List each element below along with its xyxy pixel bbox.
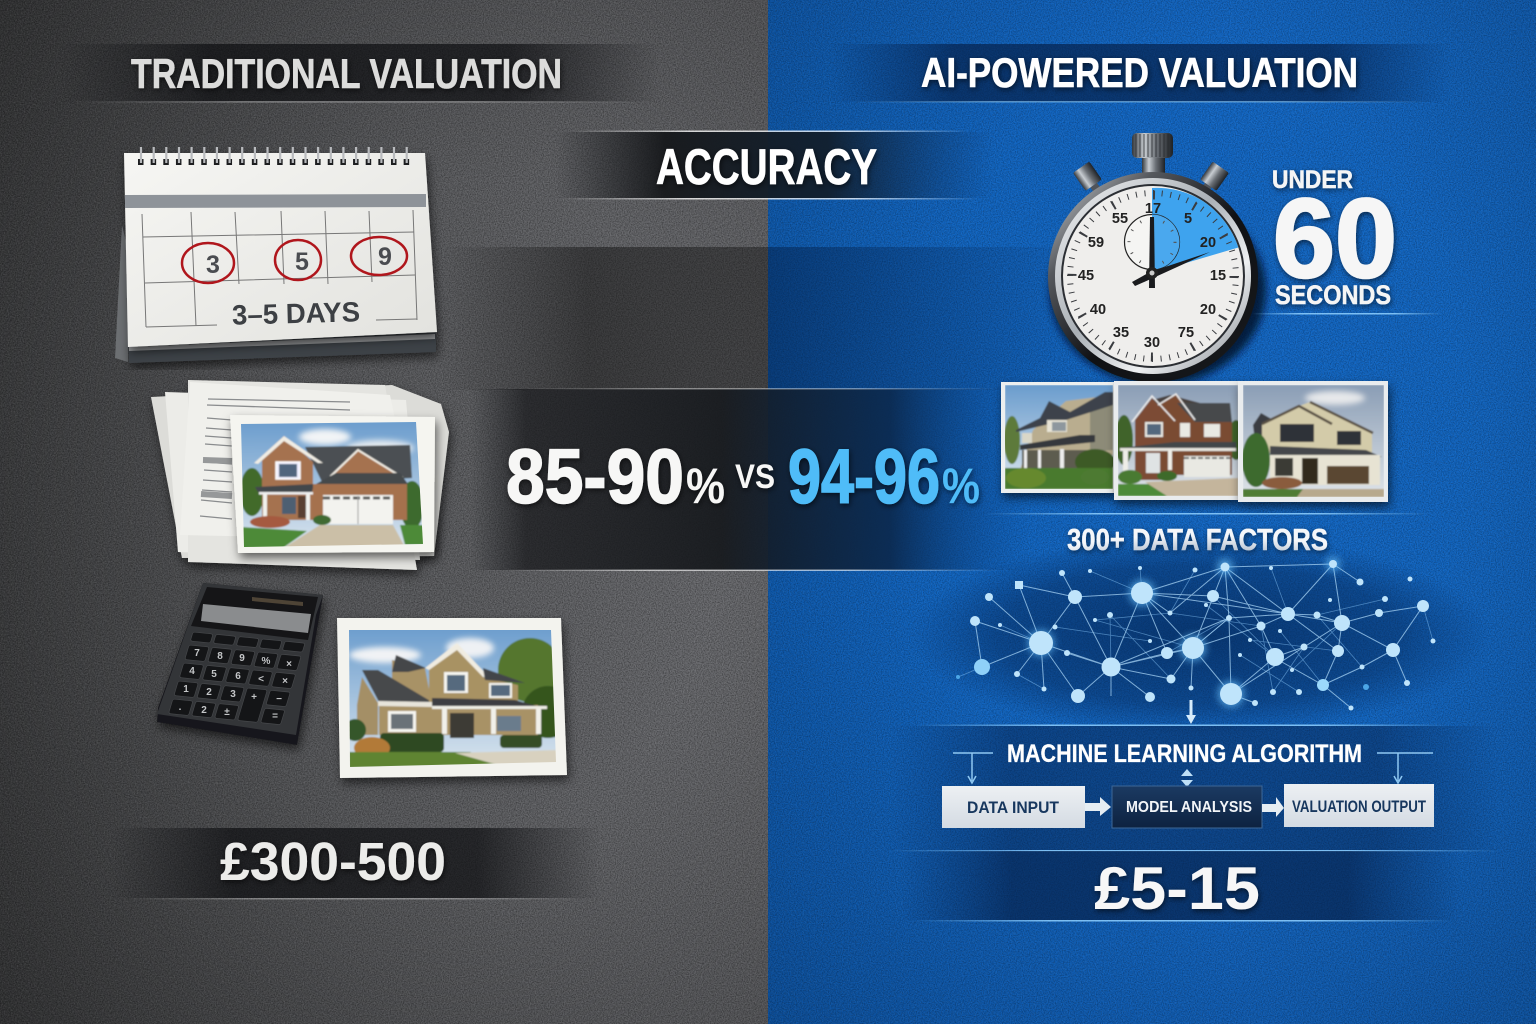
- blue elapsed wedge: [1152, 188, 1240, 273]
- icon: calculator: <: [258, 674, 264, 685]
- icon: paper stack with house photo: [151, 380, 449, 570]
- icon: calculator: .: [179, 702, 182, 713]
- icon: calculator: 5: [211, 669, 217, 680]
- icon: calculator: 4: [189, 666, 195, 677]
- icon: desk calendar: 9: [378, 243, 392, 271]
- icon: stopwatch: [1048, 133, 1266, 385]
- flow box: data input: DATA INPUT: [967, 798, 1060, 817]
- dial numbers: 30: [1144, 335, 1160, 351]
- dark upper accuracy section: [440, 247, 1088, 390]
- arrow: input to model: [1085, 797, 1111, 816]
- dial numbers: 20: [1200, 235, 1216, 251]
- cost band: traditional: [110, 828, 600, 900]
- stat: under 60 seconds: 60: [1273, 176, 1397, 301]
- network links: [975, 564, 1423, 708]
- heading: AI-powered valuation: AI-POWERED VALUATION: [921, 49, 1358, 96]
- icon: calculator: 6: [235, 671, 241, 682]
- stat: accuracy 85-90% vs 94-96%: [506, 434, 980, 520]
- icon: calculator: [157, 583, 323, 745]
- dial numbers: 20: [1200, 302, 1216, 318]
- network glow nodes: [1028, 557, 1340, 707]
- icon: desk calendar: 3–5 DAYS: [232, 296, 360, 331]
- icon: desk calendar: 5: [295, 248, 309, 276]
- icon: calculator: 3: [230, 689, 236, 700]
- icon: calculator: +: [251, 692, 257, 703]
- photo 3: [1238, 381, 1388, 502]
- dial numbers: 59: [1088, 235, 1104, 251]
- house photos: strip of three comparables: [1001, 381, 1388, 502]
- hands: [1132, 217, 1210, 288]
- arrow: network down to algorithm: [1186, 700, 1196, 724]
- dial numbers: 35: [1113, 325, 1129, 341]
- neural network graphic: [956, 557, 1436, 710]
- divider lines: [890, 724, 1500, 852]
- stat: AI cost: £5-15: [1094, 855, 1260, 922]
- arrow: double-headed up down: [1181, 769, 1193, 787]
- heading: accuracy: ACCURACY: [656, 139, 877, 195]
- network nodes: [956, 560, 1436, 710]
- stat: accuracy 85-90% vs 94-96%: 94-96: [788, 434, 940, 520]
- divider under stat: [1252, 313, 1442, 314]
- dial numbers: [1078, 201, 1226, 351]
- dial numbers: 55: [1112, 211, 1128, 227]
- panel: traditional background: [0, 0, 768, 1024]
- house photo: brick house: [238, 420, 428, 550]
- stat: traditional cost: £300-500: [220, 832, 446, 892]
- icon: calculator: ×: [282, 676, 288, 687]
- icon: calculator: 2: [201, 705, 207, 716]
- flow box: model analysis: [1112, 786, 1262, 828]
- arrow: model to output: [1262, 797, 1284, 817]
- panel: AI background: [768, 0, 1536, 1024]
- icon: calculator: 9: [239, 653, 245, 664]
- icon: desk calendar: 3: [206, 251, 220, 279]
- accuracy band: [555, 130, 995, 200]
- dial numbers: 40: [1090, 302, 1106, 318]
- photo 2: [1114, 381, 1244, 500]
- flow box: model analysis: MODEL ANALYSIS: [1126, 799, 1252, 816]
- icon: calculator: −: [276, 694, 282, 705]
- network dark backdrop: [910, 535, 1490, 735]
- icon: calculator: =: [272, 711, 278, 722]
- connector arrows from heading to boxes: [953, 753, 1433, 783]
- machine learning section backdrop: [890, 726, 1500, 850]
- circled dates: [182, 237, 407, 283]
- flow box: data input: [942, 786, 1085, 828]
- icon: calculator: ±: [224, 707, 230, 718]
- dial numbers: 15: [1210, 268, 1226, 284]
- heading band: traditional valuation: [60, 44, 660, 102]
- icon: calculator: 8: [217, 651, 223, 662]
- stat: accuracy 85-90% vs 94-96%: %: [942, 458, 980, 514]
- flow box: valuation output: VALUATION OUTPUT: [1292, 797, 1426, 816]
- heading: 300+ data factors: 300+ DATA FACTORS: [1067, 522, 1328, 557]
- crown and pushers: [1073, 133, 1229, 197]
- stat: under 60 seconds: SECONDS: [1275, 280, 1391, 310]
- icon: desk calendar: [115, 147, 437, 363]
- dial numbers: 75: [1178, 325, 1194, 341]
- stat: accuracy 85-90% vs 94-96%: 85-90: [506, 434, 684, 520]
- tick marks: [1070, 193, 1236, 359]
- icon: calculator: 1: [183, 684, 189, 695]
- dial numbers: 17: [1145, 201, 1161, 217]
- dial numbers: 5: [1184, 211, 1192, 227]
- heading band: AI valuation: [830, 44, 1450, 102]
- spiral rings: [138, 147, 410, 163]
- stat: accuracy 85-90% vs 94-96%: VS: [735, 458, 775, 496]
- icon: calculator: 7: [194, 648, 200, 659]
- network faint links: [958, 568, 1433, 692]
- icon: calculator: ×: [286, 659, 292, 670]
- heading: machine learning algorithm: MACHINE LEARNING ALGORITHM: [1007, 740, 1362, 768]
- dial numbers: 45: [1078, 268, 1094, 284]
- accuracy comparison band: [470, 388, 1030, 571]
- calculator keys: [169, 632, 305, 725]
- stat: under 60 seconds: UNDER: [1272, 166, 1353, 194]
- photo 1: [1001, 382, 1115, 493]
- flow box: valuation output: [1284, 784, 1434, 827]
- icon: calculator: %: [262, 656, 271, 667]
- cost band: AI: [900, 851, 1460, 922]
- stat: accuracy 85-90% vs 94-96%: %: [686, 458, 725, 514]
- sub dial: [1124, 214, 1180, 270]
- divider under photos: [985, 513, 1430, 514]
- icon: calculator: 2: [206, 687, 212, 698]
- house photo: tan house: [337, 618, 574, 778]
- heading: traditional valuation: TRADITIONAL VALUATION: [131, 50, 562, 97]
